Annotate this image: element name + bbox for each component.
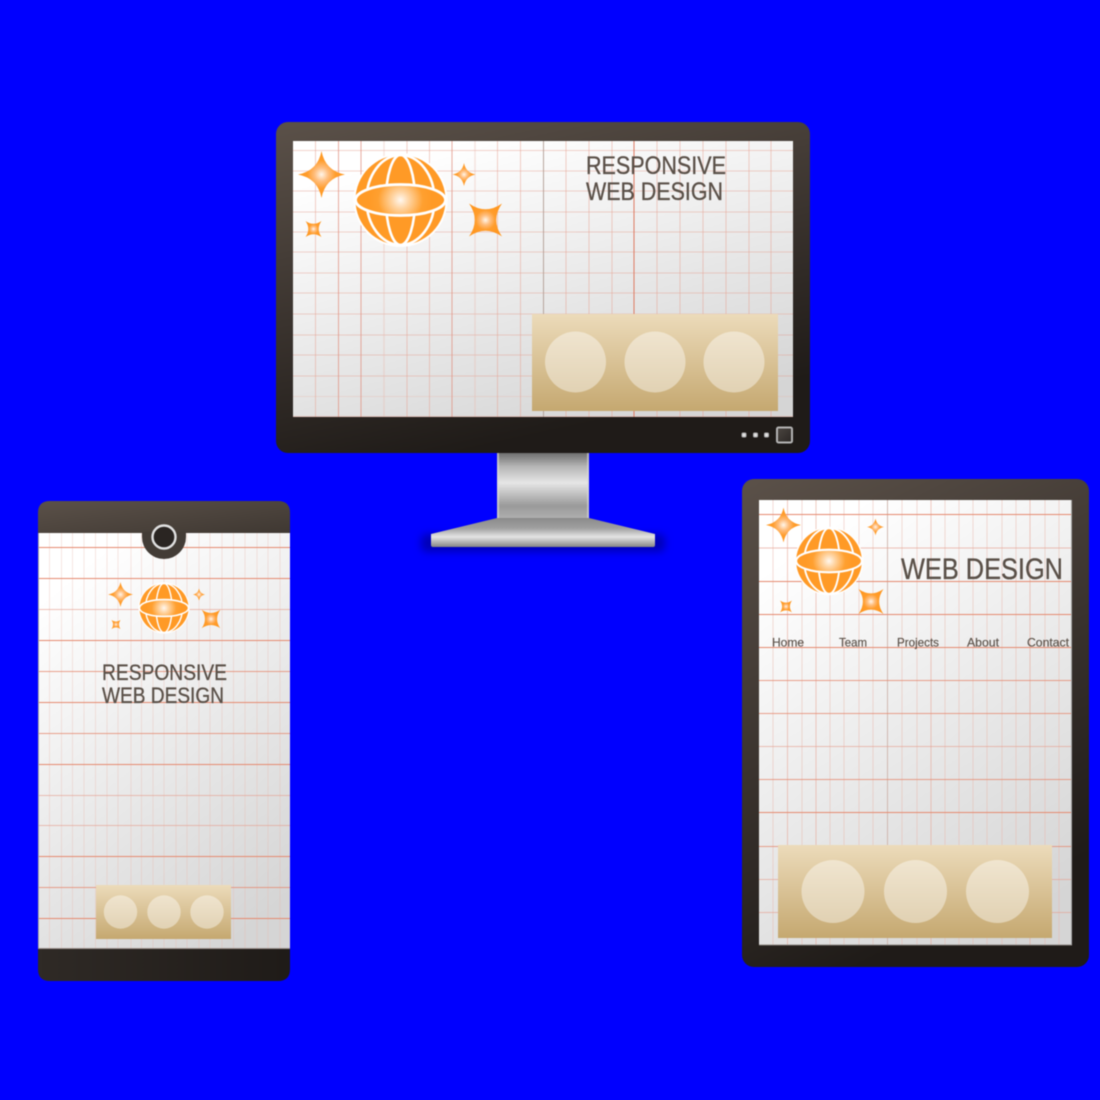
navigation menu: Contact: [1027, 636, 1070, 650]
monitor frame: [276, 122, 810, 453]
monitor screen: [293, 141, 793, 417]
feature panel tablet: [778, 845, 1052, 938]
phone camera: [142, 526, 186, 559]
heading phone: RESPONSIVE: [102, 660, 227, 685]
phone: [38, 501, 290, 981]
feature panel phone: [96, 885, 231, 939]
tablet frame: [742, 479, 1089, 967]
heading desktop: WEB DESIGN: [586, 178, 723, 206]
navigation menu: [772, 636, 1070, 650]
navigation menu: Team: [839, 636, 867, 650]
tablet screen: [759, 500, 1072, 946]
heading desktop: RESPONSIVE: [586, 152, 726, 180]
phone screen: [38, 533, 290, 949]
feature panel desktop: [532, 314, 778, 411]
navigation menu: About: [967, 636, 1000, 650]
heading tablet: WEB DESIGN: [901, 553, 1063, 586]
navigation menu: Projects: [897, 636, 939, 650]
phone top bar: [38, 501, 290, 533]
globe logo phone: [108, 582, 220, 634]
tablet: [742, 479, 1089, 967]
heading phone: [102, 660, 227, 708]
globe logo tablet: [766, 508, 884, 614]
phone bottom bar: [38, 949, 290, 981]
desktop monitor: [276, 122, 810, 552]
heading desktop: [586, 152, 726, 206]
monitor stand: [421, 453, 665, 552]
monitor controls: [742, 428, 792, 442]
navigation menu: Home: [772, 636, 804, 650]
globe logo desktop: [298, 151, 502, 247]
heading phone: WEB DESIGN: [102, 683, 224, 708]
